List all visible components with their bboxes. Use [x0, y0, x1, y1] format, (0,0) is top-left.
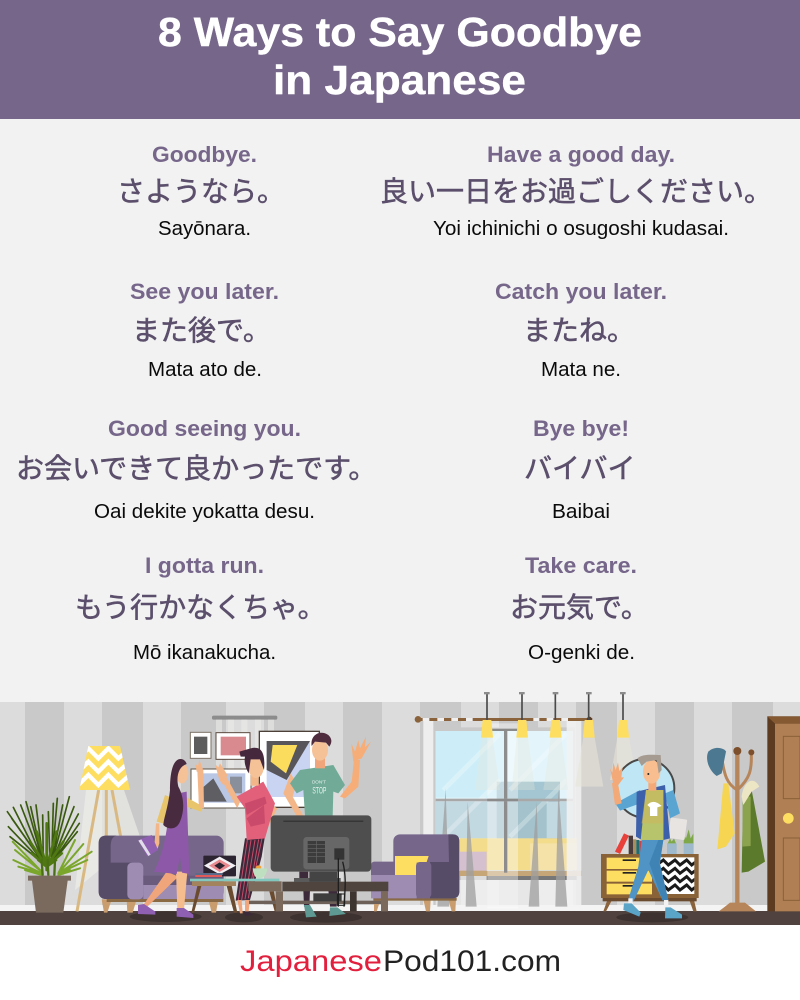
armchair — [371, 834, 459, 911]
footer brand: Japanese — [240, 945, 382, 978]
phrase: Take care: Take care. — [525, 553, 637, 578]
phrase: Good seeing you: お会いできて良かったです。 — [16, 453, 376, 484]
ceiling pendant lights — [475, 692, 637, 790]
phrase: I gotta run: もう行かなくちゃ。 — [75, 592, 326, 623]
phrase: Catch you later — [495, 279, 667, 381]
window with curtains — [415, 716, 592, 908]
phrase: Good seeing you: Good seeing you. — [108, 416, 301, 441]
phrase: See you later — [130, 279, 279, 381]
phrase: I gotta run — [75, 553, 326, 664]
man in green t-shirt: DON'T — [312, 779, 326, 784]
title: in Japanese — [273, 57, 526, 103]
phrase: Good seeing you: Oai dekite yokatta desu. — [94, 501, 315, 523]
living room illustration — [0, 692, 800, 925]
woman with long hair — [130, 759, 204, 922]
phrase: Catch you later: またね。 — [523, 315, 635, 346]
round mirror — [616, 759, 674, 818]
framed pictures — [190, 731, 319, 808]
phrase: Bye bye: バイバイ — [524, 453, 635, 484]
potted plant — [7, 797, 92, 913]
phrase: I gotta run: I gotta run. — [145, 553, 264, 578]
phrase: Have a good day — [380, 142, 772, 240]
phrase: Goodbye: Sayōnara. — [158, 218, 251, 240]
phrase: Good seeing you — [16, 416, 376, 523]
floor — [0, 911, 800, 925]
phrase: Goodbye: さようなら。 — [117, 176, 285, 207]
phrase: Goodbye — [117, 142, 285, 240]
phrase: Catch you later: Mata ne. — [541, 359, 621, 381]
phrase: See you later: また後で。 — [132, 315, 271, 346]
phrase: Take care: O-genki de. — [528, 642, 635, 664]
picture rail — [212, 716, 277, 770]
man in green t-shirt — [283, 733, 371, 923]
sofa — [99, 836, 224, 913]
phrase: Catch you later: Catch you later. — [495, 279, 667, 304]
phrase: Goodbye: Goodbye. — [152, 142, 257, 167]
door — [767, 716, 800, 911]
floor lamp — [75, 746, 140, 911]
phrase: See you later: See you later. — [130, 279, 279, 304]
footer brand — [240, 945, 561, 978]
header banner — [0, 0, 800, 119]
woman in pink top — [215, 748, 277, 922]
title: 8 Ways to Say Goodbye — [158, 9, 642, 55]
phrase: Bye bye — [524, 416, 635, 523]
coat rack with clothes — [707, 747, 765, 911]
footer brand: Pod101.com — [383, 945, 561, 978]
man with grey hair waving — [610, 755, 688, 922]
sideboard with books and plants — [601, 829, 699, 911]
phrase: I gotta run: Mō ikanakucha. — [133, 642, 276, 664]
coffee table with books and bowl — [190, 856, 282, 913]
phrase: Take care — [510, 553, 649, 664]
phrase: Take care: お元気で。 — [510, 592, 649, 623]
phrase: Have a good day: 良い一日をお過ごしください。 — [380, 176, 772, 207]
phrase: Bye bye: Bye bye! — [533, 416, 629, 441]
title — [158, 9, 642, 103]
television on stand — [249, 815, 388, 911]
phrase: See you later: Mata ato de. — [148, 359, 262, 381]
phrase: Have a good day: Yoi ichinichi o osugoshi kudasai. — [433, 218, 729, 240]
man in green t-shirt: STOP — [312, 785, 326, 795]
phrase: Bye bye: Baibai — [552, 501, 610, 523]
phrase: Have a good day: Have a good day. — [487, 142, 675, 167]
